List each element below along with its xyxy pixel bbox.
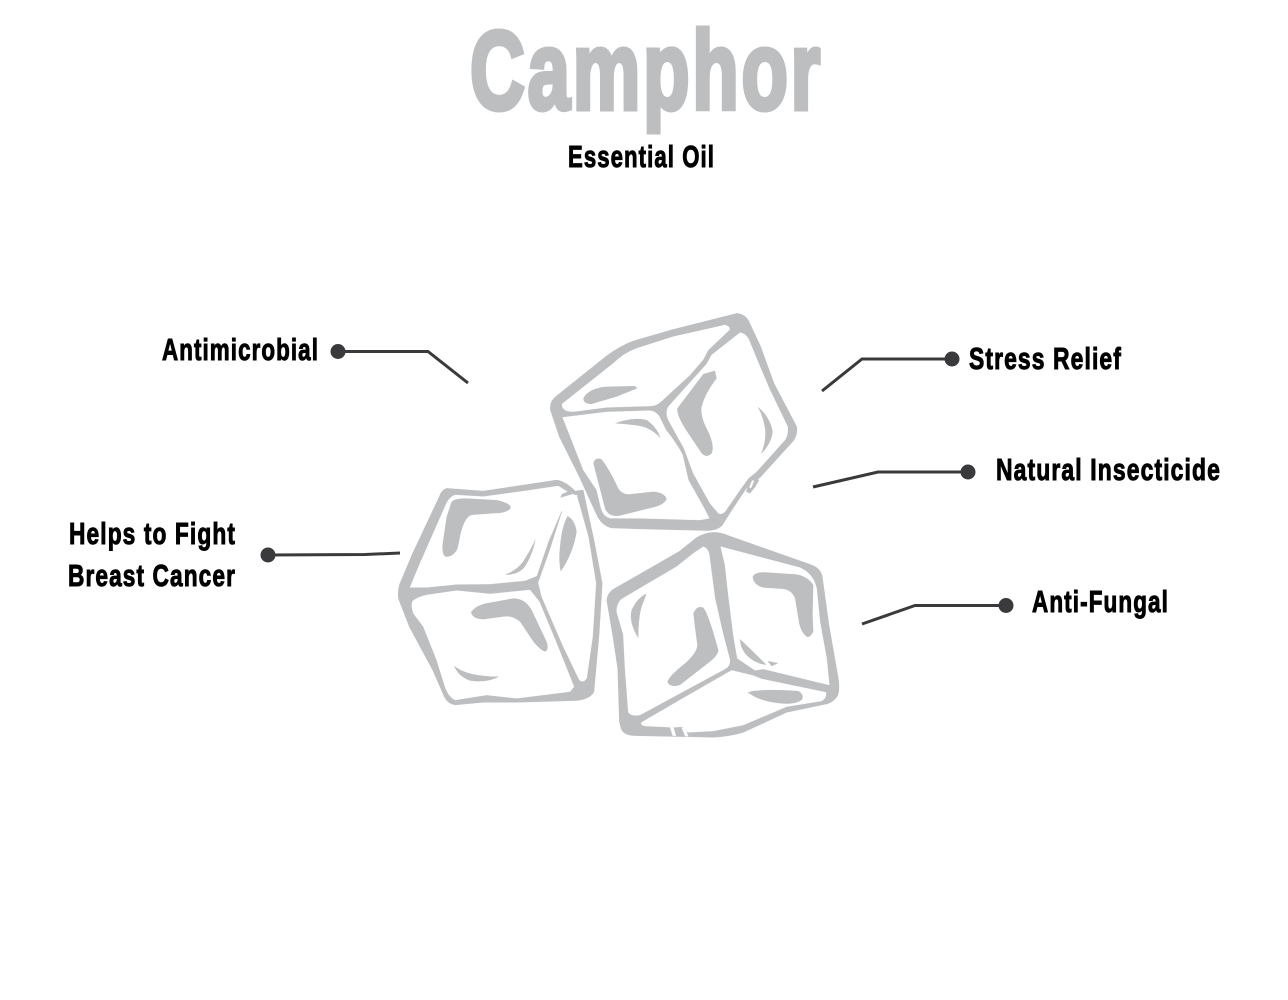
callout: Antimicrobial: Antimicrobial bbox=[162, 332, 319, 367]
callout: Antimicrobial bbox=[162, 332, 468, 383]
callout: Natural Insecticide bbox=[813, 452, 1221, 487]
subtitle: Essential Oil bbox=[568, 139, 715, 174]
callout: Stress Relief bbox=[822, 341, 1122, 391]
callout: Helps to Fight Breast Cancer bbox=[68, 516, 400, 593]
icon: top ice cube bbox=[551, 314, 796, 530]
icon: left ice cube bbox=[399, 481, 602, 704]
callout: Anti-Fungal bbox=[862, 584, 1169, 624]
callout: Helps to Fight Breast Cancer: Helps to Fight bbox=[69, 516, 236, 551]
callout: Helps to Fight Breast Cancer: Breast Cancer bbox=[68, 558, 236, 593]
icon: ice cubes bbox=[399, 314, 838, 737]
icon: right ice cube bbox=[607, 533, 838, 737]
callout: Stress Relief: Stress Relief bbox=[969, 341, 1122, 376]
callout: Anti-Fungal: Anti-Fungal bbox=[1032, 584, 1169, 619]
title: Camphor bbox=[470, 9, 823, 133]
